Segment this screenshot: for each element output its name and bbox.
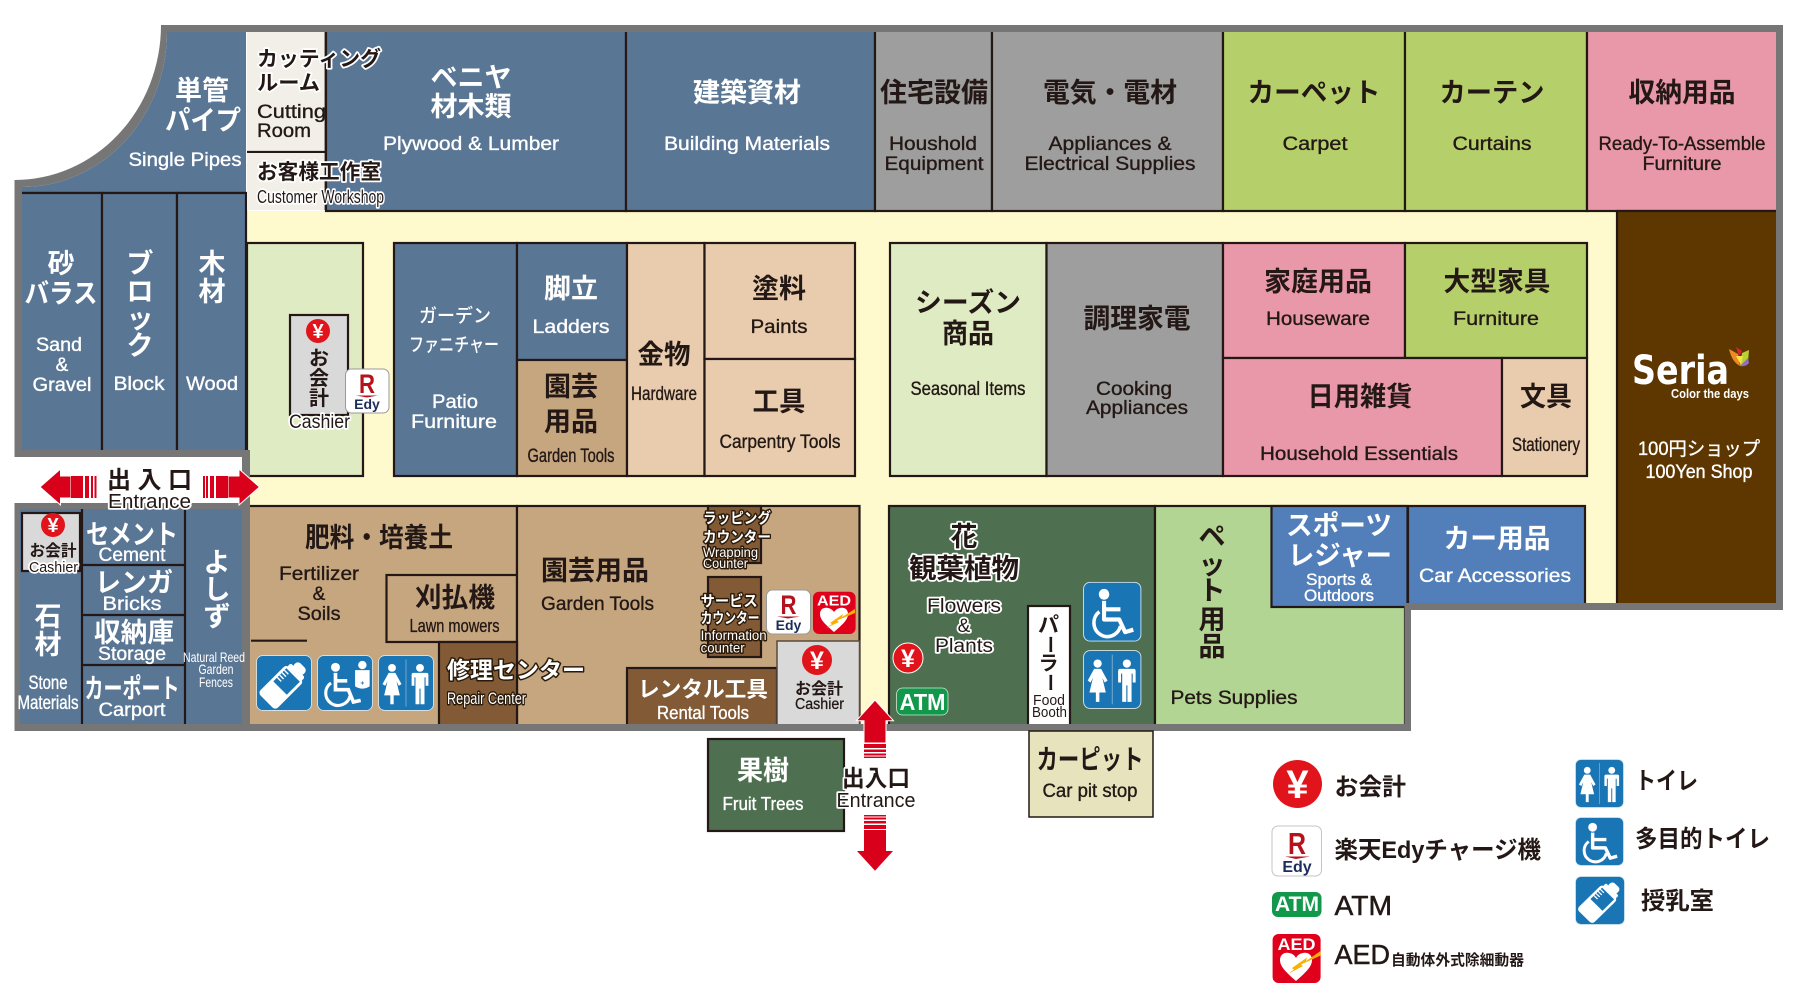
panel: cashier area	[247, 243, 363, 476]
panel: lower left yard: カーポート	[84, 674, 180, 704]
panel: lower left yard: お会計	[30, 542, 76, 560]
panel: lower left yard: 収納庫	[94, 618, 174, 648]
icon: accessible toilet	[318, 656, 372, 710]
panel: plywood and lumber: ベニヤ	[430, 63, 512, 93]
panel: cashier area: Cashier	[289, 412, 351, 433]
panel: patio furniture: ファニチャー	[409, 335, 499, 356]
background aisles	[246, 211, 1617, 726]
panel: pets supplies: ッ	[1198, 550, 1226, 580]
panel: block: ク	[126, 331, 154, 361]
panel: fertilizer and soils: Fertilizer	[279, 564, 360, 585]
heading: left entrance: 出入口	[107, 467, 192, 494]
panel: flowers and plants: &	[958, 616, 971, 637]
panel: cutting room: ルーム	[257, 72, 320, 95]
panel: block: ブ	[126, 248, 154, 279]
panel: sports and outdoors: レジャー	[1288, 541, 1392, 571]
panel: carpentry tools: Carpentry Tools	[720, 432, 840, 453]
panel: seria 100 yen shop: Color the days	[1671, 386, 1749, 401]
legend item: cashier	[1273, 760, 1406, 808]
panel: plywood and lumber: Plywood & Lumber	[383, 134, 560, 155]
labels: yard text over wall: Natural Reed	[183, 649, 245, 665]
panel: wood: 材	[198, 277, 226, 307]
panel: lawn mowers	[386, 575, 517, 642]
panel: household equipment: Houshold	[889, 134, 977, 155]
panel: garden tools small	[517, 360, 627, 476]
panel: fruit trees: Fruit Trees	[722, 794, 804, 814]
panel: cashier: お会計	[795, 680, 843, 698]
panel: seria 100 yen shop: Seria	[1632, 348, 1729, 394]
panel: houseware	[1223, 243, 1405, 358]
panel: cooking appliances: Cooking	[1096, 379, 1172, 400]
panel: sports and outdoors	[1272, 506, 1408, 607]
panel: seria 100 yen shop: 100円ショップ	[1638, 438, 1760, 460]
arrow: entrance down	[857, 815, 893, 871]
panel: sand and gravel	[18, 193, 102, 453]
panel: wrapping counter	[703, 506, 771, 571]
panel: wood	[177, 193, 246, 453]
panel: cooking appliances: 調理家電	[1084, 304, 1190, 334]
panel: cashier: Cashier	[795, 696, 844, 713]
legend item: edy charge: 楽天Edyチャージ機	[1334, 837, 1541, 864]
panel: seasonal items	[890, 243, 1046, 476]
legend	[1272, 759, 1770, 983]
panel: houseware: 家庭用品	[1264, 267, 1372, 297]
panel: customer workshop: Customer Workshop	[257, 186, 384, 207]
panel: sand and gravel: Sand	[36, 335, 82, 356]
panel: appliances and electrical supplies: Electrical Supplies	[1024, 154, 1196, 175]
panel: food booth: Food	[1033, 692, 1065, 709]
icon: toilets	[1084, 651, 1141, 708]
heading: bottom entrance: 出入口	[842, 765, 910, 791]
panel: household equipment: 住宅設備	[880, 78, 988, 108]
panel: lower left yard: 石	[34, 602, 62, 632]
panel: information counter: counter	[701, 640, 745, 656]
panel: furniture	[1405, 243, 1587, 358]
icon: edy charge: R	[359, 369, 375, 399]
panel: sports and outdoors: Outdoors	[1304, 586, 1374, 605]
panel: paints: Paints	[750, 317, 808, 338]
legend item: ATM: ATM	[1334, 890, 1392, 921]
panel: lower left yard: し	[204, 575, 230, 605]
panel: furniture: Furniture	[1453, 309, 1539, 330]
panel: lower left yard: Storage	[98, 644, 166, 665]
panel: cashier	[777, 641, 860, 726]
panel: appliances and electrical supplies	[992, 28, 1223, 211]
panel: customer workshop	[247, 153, 384, 210]
panel: lower left yard: 材	[34, 630, 62, 660]
panel: lower left yard: セメント	[86, 520, 178, 550]
panel: patio furniture: Patio	[432, 392, 478, 413]
panel: ladders	[517, 243, 627, 360]
panel: sports and outdoors: スポーツ	[1286, 511, 1392, 541]
panel: pets supplies: ト	[1198, 576, 1226, 606]
panel: cooking appliances	[1046, 243, 1223, 476]
icon: yen	[306, 319, 330, 343]
panel: lower left yard: ず	[204, 602, 230, 632]
panel: stationery: 文具	[1520, 382, 1572, 412]
panel: garden tools small: 園芸	[544, 372, 598, 402]
panel: wrapping counter: ラッピング	[703, 509, 771, 527]
panel: flowers and plants: Plants	[935, 636, 993, 657]
panel: flowers and plants: 観葉植物	[909, 554, 1019, 584]
panel: lawn mowers: 刈払機	[415, 583, 495, 613]
panel: ready-to-assemble furniture	[1587, 28, 1779, 211]
panel: single pipes: 単管	[175, 76, 229, 106]
legend item: AED: AED	[1278, 935, 1316, 954]
panel: sand and gravel: Gravel	[32, 375, 92, 396]
panel: lower left yard: よ	[204, 548, 230, 578]
panel: lower left yard	[20, 509, 243, 724]
panel: food booth: Booth	[1032, 704, 1067, 721]
panel: fertilizer and soils: Soils	[298, 604, 340, 625]
icon: ATM: ATM	[900, 689, 946, 715]
panel: sand and gravel: 砂	[48, 249, 74, 279]
panel: household essentials	[1223, 358, 1502, 476]
panel: food booth: ー	[1038, 673, 1060, 692]
panel: pets supplies: 用	[1198, 605, 1226, 635]
panel: fruit trees: 果樹	[737, 756, 789, 786]
panel: garden tools	[517, 506, 860, 726]
panel: fruit trees	[708, 739, 844, 831]
legend item: edy charge: R	[1288, 826, 1306, 861]
panel: block	[102, 193, 177, 453]
icon: edy charge: Edy	[354, 396, 380, 412]
panel: flowers and plants: 花	[950, 522, 978, 552]
panel: repair center	[439, 642, 585, 726]
panel: wrapping counter: カウンター	[703, 529, 771, 546]
legend item: toilet: トイレ	[1635, 768, 1698, 795]
panel: household equipment: Equipment	[884, 154, 984, 175]
panel: cashier area: 計	[309, 387, 329, 410]
panel: cashier area: 会	[309, 367, 329, 390]
heading: bottom entrance	[836, 765, 916, 812]
panel: lower left yard: Cement	[98, 545, 166, 566]
panel: food booth	[1028, 606, 1070, 726]
panel: garden tools small: Garden Tools	[528, 446, 614, 467]
heading: left entrance	[107, 467, 192, 513]
icon: accessible toilet	[1084, 582, 1141, 641]
panel: seasonal items: シーズン	[915, 287, 1021, 318]
legend item: AED: AED	[1334, 939, 1390, 970]
panel: curtains: Curtains	[1452, 134, 1532, 155]
panel: cooking appliances: Appliances	[1086, 398, 1188, 419]
legend item: nursing room: 授乳室	[1641, 888, 1714, 915]
panel: building materials: Building Materials	[664, 134, 830, 155]
icon: yen: ¥	[47, 515, 59, 537]
icon: AED	[813, 592, 856, 634]
legend item: nursing room	[1576, 876, 1714, 925]
arrow: entrance up	[856, 700, 894, 758]
panel: flowers and plants	[889, 506, 1155, 726]
panel: ready-to-assemble furniture: Furniture	[1642, 154, 1722, 175]
panel: household essentials: 日用雑貨	[1308, 382, 1412, 412]
panel: fertilizer and soils	[247, 506, 517, 726]
outer walls	[14, 25, 1783, 731]
panel: carpet: Carpet	[1282, 134, 1348, 155]
panel: cashier area: お	[309, 347, 329, 370]
labels: yard text over wall: Stone	[28, 673, 68, 694]
panel: seria 100 yen shop	[1617, 211, 1779, 606]
panel: lower left yard: Bricks	[102, 594, 162, 615]
icon: yen	[893, 643, 923, 673]
panel: fertilizer and soils: 肥料・培養土	[305, 523, 453, 553]
arrow: entrance right	[203, 469, 260, 505]
panel: stationery	[1502, 358, 1587, 476]
panel: car pit stop: Car pit stop	[1042, 781, 1138, 802]
panel: information counter: カウンター	[701, 610, 760, 627]
panel: ready-to-assemble furniture: 収納用品	[1628, 78, 1736, 108]
legend item: edy charge: Edy	[1282, 859, 1312, 876]
panel: pets supplies: ペ	[1198, 522, 1226, 552]
panel: patio furniture	[394, 243, 517, 476]
panel: car accessories: Car Accessories	[1419, 566, 1571, 587]
panel: ladders: 脚立	[544, 274, 598, 304]
panel: car pit stop	[1029, 731, 1153, 817]
panel: fertilizer and soils: &	[313, 584, 326, 605]
panel: curtains: カーテン	[1440, 78, 1544, 108]
panel: paints: 塗料	[752, 274, 806, 304]
icon: AED: AED	[817, 592, 851, 610]
panel: wood: 木	[198, 249, 226, 279]
panel: curtains	[1405, 28, 1587, 211]
panel: lower left yard: レンガ	[95, 568, 173, 598]
panel: lower left yard: Cashier	[29, 559, 78, 576]
panel: car accessories: カー用品	[1444, 524, 1550, 554]
panel: wood: Wood	[186, 374, 238, 395]
legend item: AED	[1273, 934, 1524, 983]
panel: furniture: 大型家具	[1444, 267, 1550, 297]
panel: food booth: パ	[1038, 614, 1059, 637]
panel: plywood and lumber: 材木類	[430, 92, 512, 122]
panel: ladders: Ladders	[532, 317, 610, 338]
panel: sports and outdoors: Sports &	[1306, 570, 1373, 589]
panel: repair center: Repair Center	[447, 689, 526, 708]
icon: edy charge: R	[780, 590, 796, 620]
panel: repair center: 修理センター	[447, 657, 585, 683]
panel: single pipes	[22, 32, 246, 193]
labels: yard text over wall: Garden	[198, 661, 234, 677]
panel: cutting room: カッティング	[257, 47, 381, 71]
panel: cutting room: Room	[257, 121, 311, 142]
panel: single pipes: Single Pipes	[128, 150, 242, 171]
panel: food booth: ラ	[1038, 653, 1058, 675]
panel: carpet: カーペット	[1248, 78, 1380, 108]
icon: yen	[41, 513, 65, 537]
panel: sand and gravel: バラス	[24, 279, 98, 309]
panel: paints	[704, 243, 855, 359]
panel: seasonal items: 商品	[942, 319, 994, 349]
panel: household equipment	[875, 28, 992, 211]
legend item: cashier: お会計	[1334, 774, 1406, 801]
panel: hardware: 金物	[638, 340, 690, 370]
panel: sand and gravel: &	[56, 355, 69, 376]
panel: garden tools small: 用品	[544, 407, 598, 437]
arrow: entrance left	[40, 469, 96, 505]
panel: food booth: ー	[1038, 635, 1060, 654]
heading: bottom entrance: Entrance	[836, 790, 916, 812]
panel: pets supplies: Pets Supplies	[1170, 688, 1298, 709]
panel: building materials	[626, 28, 875, 211]
panel: lower left yard: Carport	[98, 700, 166, 721]
panel: ready-to-assemble furniture: Ready-To-Assemble	[1598, 134, 1766, 155]
panel: block: ッ	[126, 304, 154, 334]
panel: carpentry tools: 工具	[752, 387, 806, 417]
panel: garden tools: Garden Tools	[541, 594, 654, 615]
legend item: AED: 自動体外式除細動器	[1391, 951, 1524, 969]
panel: plywood and lumber	[326, 28, 626, 211]
heading: left entrance: Entrance	[108, 491, 191, 513]
legend item: cashier: ¥	[1286, 763, 1309, 807]
panel: wrapping counter: Counter	[703, 555, 748, 571]
panel: flowers and plants: Flowers	[927, 596, 1001, 617]
panel: pets supplies	[1155, 506, 1405, 726]
labels: yard text over wall	[18, 649, 245, 714]
panel: cutting room	[247, 32, 381, 152]
panel: patio furniture: ガーデン	[419, 304, 491, 327]
panel: lawn mowers: Lawn mowers	[410, 616, 500, 636]
panel: rental tools: Rental Tools	[657, 703, 749, 723]
panel: block: ロ	[126, 277, 154, 307]
panel: garden tools: 園芸用品	[541, 556, 649, 586]
legend item: accessible toilet: 多目的トイレ	[1635, 826, 1770, 853]
panel: patio furniture: Furniture	[411, 412, 497, 433]
icon: nursing room	[257, 656, 311, 710]
panel: block: Block	[114, 374, 165, 395]
panel: information counter	[701, 577, 767, 657]
legend item: accessible toilet	[1575, 817, 1770, 866]
panel: information counter: Information	[701, 627, 767, 643]
panel: household essentials: Household Essentials	[1260, 444, 1458, 465]
icon: yen: ¥	[810, 647, 824, 675]
panel: car accessories	[1408, 506, 1585, 606]
panel: hardware	[627, 243, 704, 476]
icon: edy charge	[766, 590, 810, 634]
icon: yen: ¥	[312, 321, 324, 343]
panel: car pit stop: カーピット	[1036, 745, 1144, 775]
panel: cutting room: Cutting	[257, 102, 326, 123]
icon: edy charge	[346, 369, 389, 413]
panel: rental tools	[627, 668, 777, 726]
labels: yard text over wall: Fences	[199, 674, 233, 690]
panel: appliances and electrical supplies: Appliances &	[1048, 134, 1172, 155]
panel: houseware: Houseware	[1266, 309, 1370, 330]
panel: wrapping counter: Wrapping	[703, 544, 758, 560]
icon: toilets	[379, 656, 433, 710]
panel: customer workshop: お客様工作室	[257, 161, 381, 184]
legend item: ATM: ATM	[1275, 893, 1319, 916]
panel: pets supplies: 品	[1198, 632, 1226, 662]
panel: seria 100 yen shop: 100Yen Shop	[1646, 462, 1752, 483]
panel: appliances and electrical supplies: 電気・電材	[1043, 78, 1177, 108]
legend item: toilet	[1575, 759, 1698, 808]
panel: carpet	[1223, 28, 1405, 211]
icon: yen: ¥	[901, 645, 915, 673]
panel: information counter: サービス	[701, 592, 758, 610]
panel: building materials: 建築資材	[693, 78, 801, 108]
icon: edy charge: Edy	[776, 617, 802, 633]
legend item: edy charge	[1272, 826, 1541, 876]
panel: rental tools: レンタル工具	[638, 677, 768, 702]
labels: yard text over wall: Materials	[18, 693, 78, 714]
panel: carpentry tools	[704, 359, 855, 476]
panel: seasonal items: Seasonal Items	[910, 379, 1026, 400]
panel: hardware: Hardware	[631, 384, 697, 405]
panel: stationery: Stationery	[1512, 435, 1580, 456]
legend item: ATM	[1272, 890, 1392, 921]
panel: single pipes: パイプ	[165, 106, 241, 136]
